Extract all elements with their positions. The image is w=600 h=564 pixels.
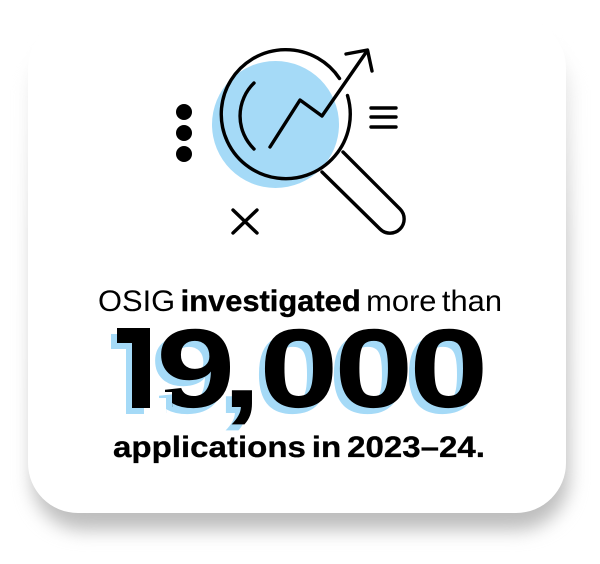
text: lead-in line: OSIG investigated more than bbox=[98, 285, 502, 318]
icon: three dots bbox=[176, 104, 192, 162]
icon: rising arrow line bbox=[270, 51, 367, 147]
big number: 19,000 bbox=[97, 306, 488, 431]
icon: blue circle bbox=[212, 61, 339, 188]
card panel bbox=[28, 18, 566, 513]
icon: lens ring bbox=[221, 50, 350, 179]
icon: handle bbox=[322, 152, 404, 233]
icon: arrowhead bbox=[346, 50, 372, 71]
icon: magnifying glass with rising chart bbox=[176, 50, 404, 233]
icon: lens glare arc bbox=[240, 83, 254, 149]
big number shadow: 19,000 bbox=[91, 312, 482, 437]
icon: cross bbox=[233, 210, 257, 233]
card shadow bbox=[32, 40, 569, 530]
text: closing line: applications in 2023–24. bbox=[113, 431, 485, 464]
icon: three lines bbox=[371, 108, 396, 127]
